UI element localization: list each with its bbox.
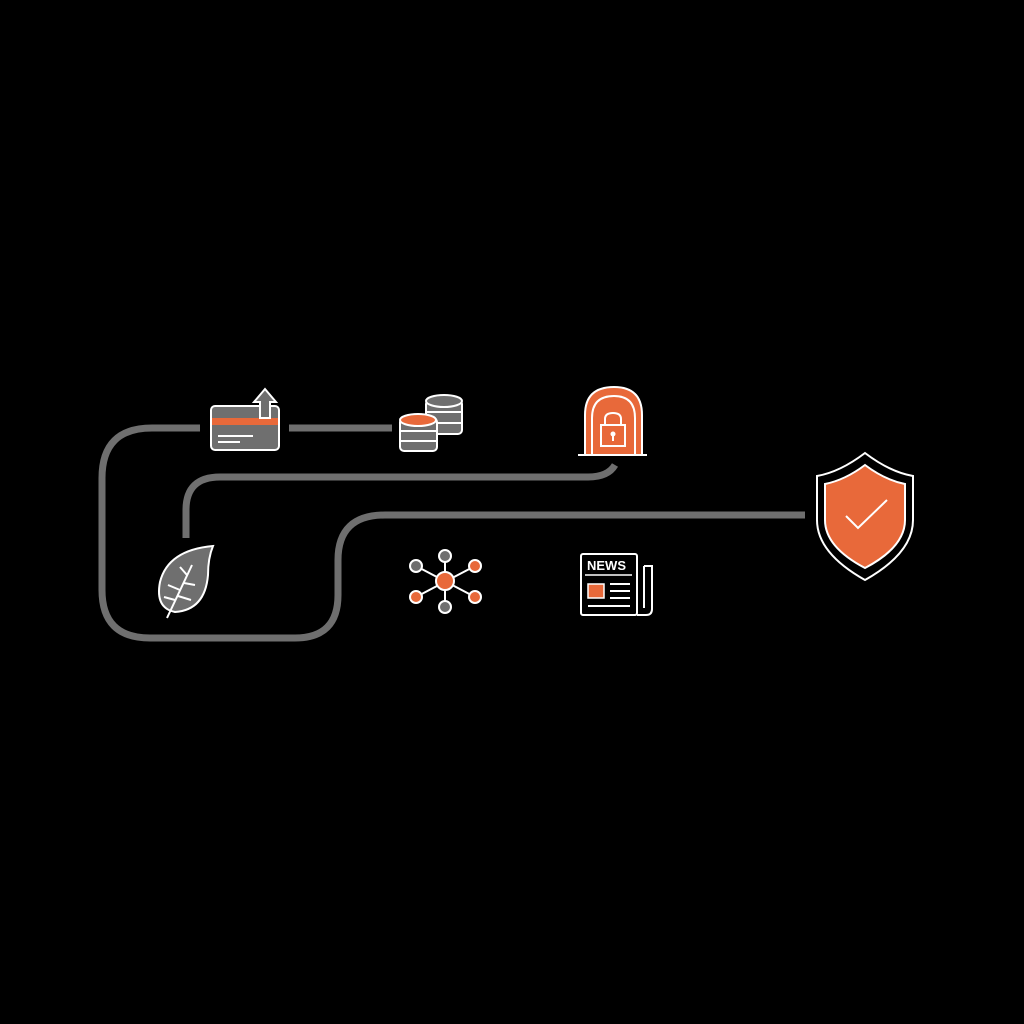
- icon: network: [410, 550, 481, 613]
- path: outer route: [102, 428, 805, 638]
- path: card to coins: [289, 424, 392, 432]
- icon: arch lock: [578, 387, 647, 455]
- icon: shield: [817, 453, 913, 580]
- path: inner route: [186, 465, 615, 538]
- icon: coins: [400, 395, 462, 451]
- icon: leaf: [159, 546, 213, 618]
- icon: newspaper: [581, 554, 652, 615]
- icon: card with upload arrow: [211, 389, 279, 450]
- icon: newspaper: NEWS: [587, 558, 626, 573]
